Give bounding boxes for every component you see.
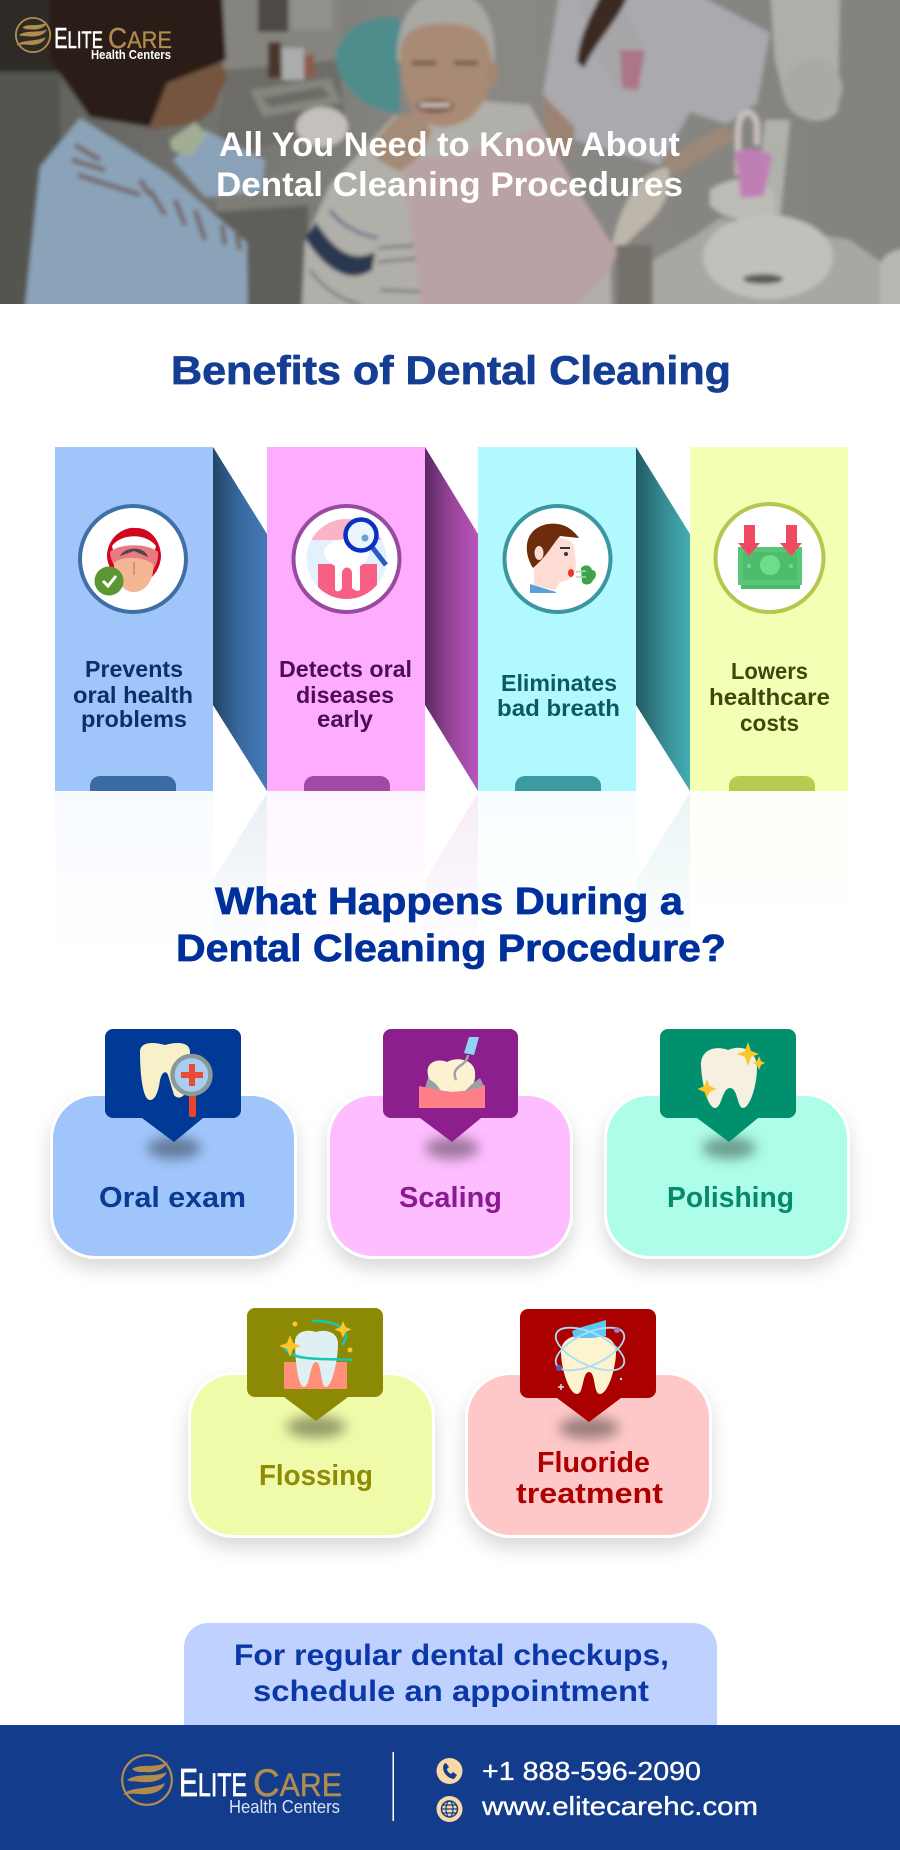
panel: prevents oral health problems [55,447,267,791]
footer logo [122,1755,342,1817]
panel reflections [55,791,848,961]
title: Dental Cleaning Procedures [216,166,683,204]
icon: bad breath face [504,506,610,612]
heading: procedure [176,881,726,970]
heading: procedure: Dental Cleaning Procedure? [176,928,726,970]
pin [247,1308,383,1421]
pin [383,1029,518,1142]
footer wordmark elite: ELITE [179,1762,247,1805]
logo tagline: Health Centers [91,47,171,62]
label: Lowers [731,658,808,684]
panel: eliminates bad breath [478,447,690,791]
label [709,658,830,736]
label: Scaling [399,1182,502,1214]
icon: globe [436,1796,462,1822]
bib [404,130,618,304]
card: flossing [190,1308,434,1536]
label: Flossing [259,1460,373,1492]
logo wordmark: ELITE [54,23,103,55]
call to action [184,1623,717,1725]
card: oral exam [52,1029,296,1258]
patient sweater [301,100,612,325]
icon: tongue [80,506,186,612]
heading: procedure: What Happens During a [215,881,684,923]
label: Detects oral [279,656,412,682]
icon: shining tooth [698,1042,765,1108]
phone number: +1 888-596-2090 [482,1756,701,1786]
dental unit [770,0,840,120]
pin [520,1309,656,1422]
label: treatment [516,1478,664,1510]
panel: lowers healthcare costs [690,447,848,791]
label: diseases [296,682,394,708]
hero photo [0,0,900,330]
footer wordmark care: CARE [253,1762,342,1805]
website: www.elitecarehc.com [481,1791,758,1821]
label [497,670,620,721]
label [516,1447,664,1510]
label: Fluoride [537,1447,650,1479]
icon: tooth and magnifier [294,506,400,612]
pin [660,1029,796,1142]
panel: detects oral diseases early [267,447,478,791]
icon: scaling tooth [419,1037,485,1108]
label: bad breath [497,695,620,721]
title: All You Need to Know About [219,126,680,164]
footer tagline: Health Centers [229,1797,340,1817]
footer emblem [122,1755,172,1805]
assistant [543,0,770,165]
label: Oral exam [99,1182,246,1214]
footer [0,1725,900,1850]
label: healthcare [709,684,830,710]
label: oral health [73,682,193,708]
title [216,126,683,204]
label: Prevents [85,656,183,682]
label [73,656,193,732]
label [279,656,412,732]
patient head [394,0,496,64]
icon: flossing tooth [279,1321,352,1389]
logo wordmark care: CARE [108,23,172,55]
icon: money with down arrows [716,504,824,612]
label: Polishing [667,1182,794,1214]
icon: tooth with magnifier [140,1043,210,1117]
card: fluoride treatment [466,1309,710,1536]
call to action: schedule an appointment [253,1675,649,1708]
header logo [16,18,172,62]
logo emblem [16,18,50,52]
label: early [317,706,373,732]
label: costs [740,710,799,736]
card: polishing [606,1029,848,1258]
label: problems [81,706,187,732]
icon: fluoride tooth [550,1319,630,1394]
label: Eliminates [501,670,617,696]
call to action: For regular dental checkups, [234,1639,669,1672]
pin [105,1029,241,1142]
icon: phone [436,1758,462,1784]
card: scaling [328,1029,572,1258]
heading: benefits: Benefits of Dental Cleaning [171,349,731,393]
doctor [23,118,248,325]
